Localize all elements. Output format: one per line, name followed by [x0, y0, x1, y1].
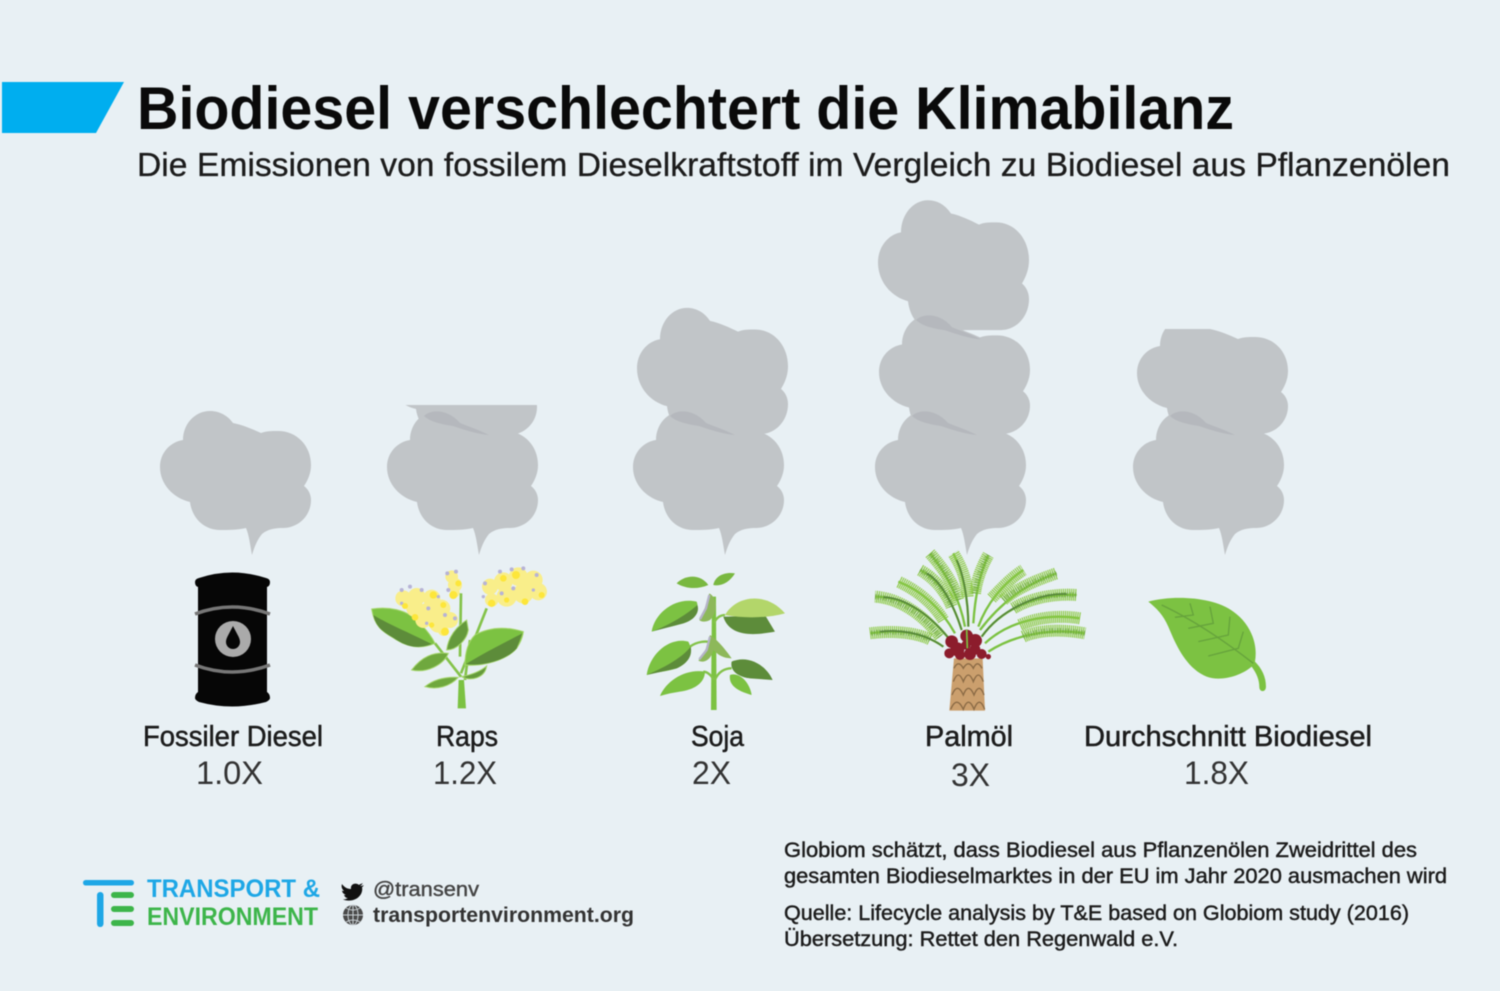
labels: Palmöl [925, 721, 1013, 793]
labels: Raps: Raps [436, 721, 498, 753]
clouds: Palmöl [875, 200, 1030, 555]
labels: fossil diesel [143, 721, 323, 791]
labels: Raps: 1.2X [433, 755, 497, 791]
social links: @transenv [373, 879, 479, 901]
icon: leaf [1148, 598, 1266, 691]
labels: Soja: 2X [692, 755, 731, 791]
labels: fossil diesel: 1.0X [196, 755, 263, 791]
header banner [2, 82, 124, 133]
text block: source: Quelle: Lifecycle analysis by T&E based on Globiom study (2016) [784, 902, 1409, 925]
labels: Durchschnitt Biodiesel: Durchschnitt Biodiesel [1084, 721, 1372, 753]
labels: Durchschnitt Biodiesel: 1.8X [1184, 755, 1249, 791]
icon: soybean plant [647, 573, 785, 710]
labels: Soja [691, 721, 745, 791]
icon: twitter bird [342, 883, 364, 901]
social links [342, 879, 634, 927]
icon: globe [343, 905, 363, 925]
labels: Durchschnitt Biodiesel [1084, 721, 1372, 791]
text block: note: gesamten Biodieselmarktes in der EU im Jahr 2020 ausmachen wird [784, 865, 1447, 888]
icon: rapeseed plant [372, 566, 547, 708]
clouds: Durchschnitt Biodiesel [1133, 317, 1288, 555]
logo: Transport & Environment: ENVIRONMENT [147, 903, 318, 931]
icon: oil barrel [195, 572, 270, 706]
subtitle: Die Emissionen von fossilem Dieselkraftstoff im Vergleich zu Biodiesel aus Pflanzenölen [137, 146, 1450, 183]
text block: source [784, 902, 1409, 951]
title: Biodiesel verschlechtert die Klimabilanz [137, 75, 1234, 142]
labels: Raps [433, 721, 498, 791]
labels: Palmöl: Palmöl [925, 721, 1013, 753]
labels: Palmöl: 3X [951, 757, 990, 793]
social links: transportenvironment.org [373, 904, 634, 927]
icon: oil palm [870, 553, 1085, 711]
clouds: Raps [386, 404, 538, 554]
text block: note [784, 839, 1447, 888]
logo: Transport & Environment [83, 875, 320, 931]
labels: Soja: Soja [691, 721, 745, 753]
text block: source: Übersetzung: Rettet den Regenwald e.V. [784, 928, 1178, 951]
clouds: Soja [633, 308, 788, 555]
labels: fossil diesel: Fossiler Diesel [143, 721, 323, 753]
logo: Transport & Environment: TRANSPORT & [147, 875, 320, 903]
clouds: fossil diesel [160, 411, 311, 555]
text block: note: Globiom schätzt, dass Biodiesel aus Pflanzenölen Zweidrittel des [784, 839, 1417, 862]
